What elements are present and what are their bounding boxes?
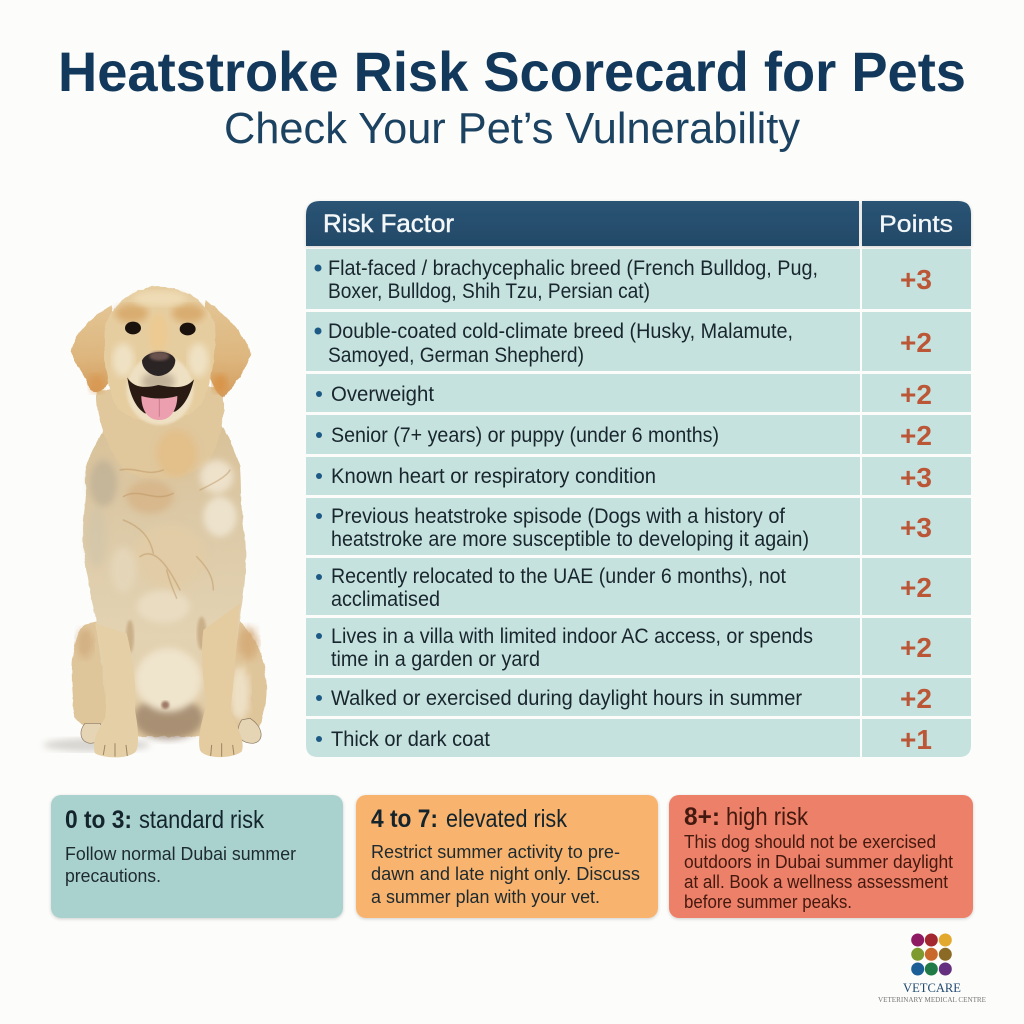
card: high risk: at all. Book a wellness assessment [684,872,948,892]
table header: Risk Factor [323,210,454,238]
row 9: +2 [900,683,932,714]
row 6 [306,498,971,555]
row 2: +2 [900,327,932,358]
row 2: Samoyed, German Shepherd) [328,344,584,367]
row 10 [306,719,971,757]
row 7: Recently relocated to the UAE (under 6 months), not [331,565,786,588]
logo: Vetcare: VETCARE [903,980,961,995]
card: elevated risk: Restrict summer activity to pre- [371,842,620,862]
card: high risk: This dog should not be exercised [684,832,936,852]
muzzle [127,355,193,425]
nose [142,352,175,376]
card: standard risk: precautions. [65,866,161,886]
card: elevated risk: 4 to 7: [371,805,438,833]
row 7: acclimatised [331,588,440,611]
row 1: Boxer, Bulldog, Shih Tzu, Persian cat) [328,280,650,303]
row 8: time in a garden or yard [331,648,540,671]
card: elevated risk: elevated risk [446,805,567,833]
row 6: +3 [900,512,932,543]
toes [103,743,234,757]
fur mass [72,387,267,738]
title: Heatstroke Risk Scorecard for Pets [58,40,966,103]
tongue [141,396,177,420]
card: high risk: before summer peaks. [684,892,852,912]
table: risk factors [306,201,971,757]
row 5: +3 [900,462,932,493]
table header: Points [879,211,953,238]
card: elevated risk [356,795,658,918]
haunches [72,603,267,738]
subtitle: Check Your Pet’s Vulnerability [224,104,800,153]
card: standard risk: Follow normal Dubai summer [65,844,296,864]
card: standard risk: standard risk [139,806,264,834]
front legs [94,623,138,757]
illustration: golden retriever [43,287,267,757]
neck ruff [96,387,224,479]
card: standard risk: 0 to 3: [65,806,132,834]
row 5: Known heart or respiratory condition [331,465,656,488]
row 3: Overweight [331,383,434,406]
row 4: +2 [900,420,932,451]
card: elevated risk: a summer plan with your vet. [371,887,600,907]
row 8: +2 [900,632,932,663]
row 2 [306,312,971,371]
logo: Vetcare: VETERINARY MEDICAL CENTRE [878,996,986,1004]
row 1 [306,249,971,309]
body [83,403,246,737]
row 5 [306,457,971,495]
row 7: +2 [900,572,932,603]
row 8: Lives in a villa with limited indoor AC access, or spends [331,625,813,648]
row 1: Flat-faced / brachycephalic breed (French Bulldog, Pug, [328,257,818,280]
row 7 [306,558,971,615]
chest fur strands [120,469,230,598]
row 9 [306,678,971,716]
row 10: +1 [900,724,932,755]
row 10: Thick or dark coat [331,728,490,751]
floor shadow [43,738,150,752]
card: high risk [669,795,973,918]
row 4 [306,415,971,454]
logo: Vetcare [878,934,986,1004]
card: standard risk [51,795,343,918]
chest fur tones [87,430,237,623]
row 1: +3 [900,264,932,295]
row 2: Double-coated cold-climate breed (Husky, Malamute, [328,320,793,343]
row 4: Senior (7+ years) or puppy (under 6 months) [331,424,719,447]
card: high risk: outdoors in Dubai summer daylight [684,852,953,872]
row 6: Previous heatstroke spisode (Dogs with a history of [331,505,785,528]
belly shade [133,697,203,740]
eyes [125,322,141,334]
row 3 [306,374,971,412]
mouth [127,377,194,413]
card: elevated risk: dawn and late night only. Discuss [371,864,640,884]
face tones [115,304,148,323]
card: high risk: 8+: [684,803,720,831]
row 9: Walked or exercised during daylight hours in summer [331,687,802,710]
table header [306,201,971,246]
row 6: heatstroke are more susceptible to developing it again) [331,528,809,551]
ears and head [71,287,251,422]
row 3: +2 [900,379,932,410]
back paws [81,718,261,743]
row 8 [306,618,971,675]
haunch shading [77,628,93,658]
card: high risk: high risk [726,803,808,831]
